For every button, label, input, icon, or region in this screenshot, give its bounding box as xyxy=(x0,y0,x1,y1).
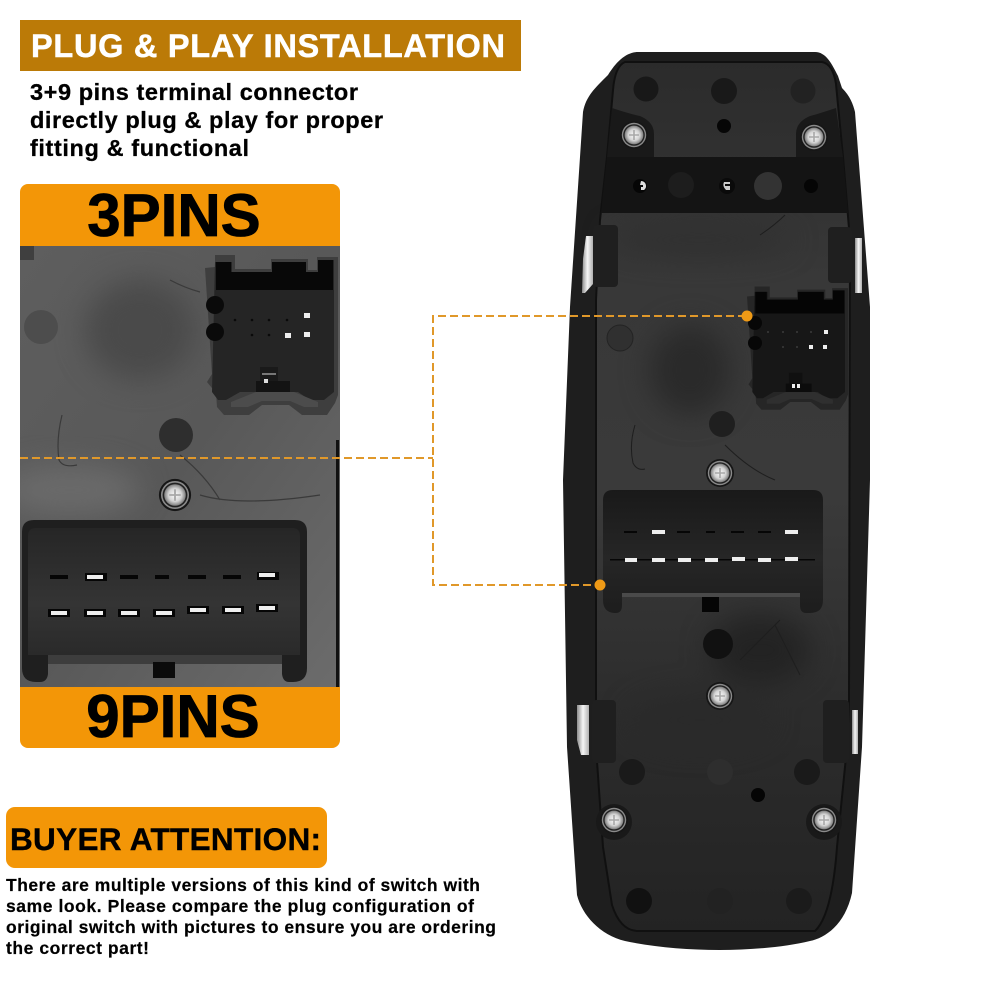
9-pin connector xyxy=(603,490,823,613)
plate shading xyxy=(610,225,810,745)
switch outer housing xyxy=(563,52,870,950)
mid holes xyxy=(607,325,735,659)
side tabs xyxy=(592,225,852,763)
screw recess shadows xyxy=(596,108,843,840)
close-up header: 3PINS: 3PINS xyxy=(87,182,261,249)
callout dot: 9-pin connector xyxy=(594,580,606,590)
close-up photo xyxy=(0,246,340,687)
intro text: directly plug & play for proper xyxy=(30,107,383,133)
intro text: fitting & functional xyxy=(30,135,249,161)
buyer attention note: original switch with pictures to ensure you are ordering xyxy=(6,917,496,937)
intro text xyxy=(30,79,383,161)
buyer attention badge: BUYER ATTENTION: xyxy=(10,821,321,857)
mounting screws xyxy=(600,121,838,834)
title banner: PLUG & PLAY INSTALLATION xyxy=(31,28,505,64)
strip holes xyxy=(633,172,818,200)
9-pin connector detail xyxy=(22,520,307,682)
3-pin connector detail xyxy=(205,255,338,415)
buyer attention note xyxy=(6,875,496,958)
buyer attention badge xyxy=(6,807,327,868)
silver clips xyxy=(577,236,862,755)
buyer attention note: same look. Please compare the plug configuration of xyxy=(6,896,474,916)
lower holes xyxy=(619,759,820,914)
callout dot: 3-pin connector xyxy=(742,310,752,322)
buyer attention note: the correct part! xyxy=(6,938,149,958)
window switch photo xyxy=(563,52,870,950)
connector leader lines xyxy=(20,316,746,585)
top mounting holes xyxy=(634,76,816,133)
inner plate xyxy=(596,62,850,931)
plate scratches xyxy=(631,215,800,675)
dark cross strip xyxy=(601,157,848,213)
panel: pin close-up xyxy=(0,182,340,750)
3-pin connector xyxy=(747,287,848,410)
intro text: 3+9 pins terminal connector xyxy=(30,79,358,105)
close-up footer: 9PINS xyxy=(20,683,340,750)
title banner xyxy=(20,20,521,71)
panel: buyer attention xyxy=(6,807,496,958)
close-up header: 3PINS xyxy=(20,182,340,249)
buyer attention note: There are multiple versions of this kind of switch with xyxy=(6,875,480,895)
close-up footer: 9PINS: 9PINS xyxy=(86,683,260,750)
